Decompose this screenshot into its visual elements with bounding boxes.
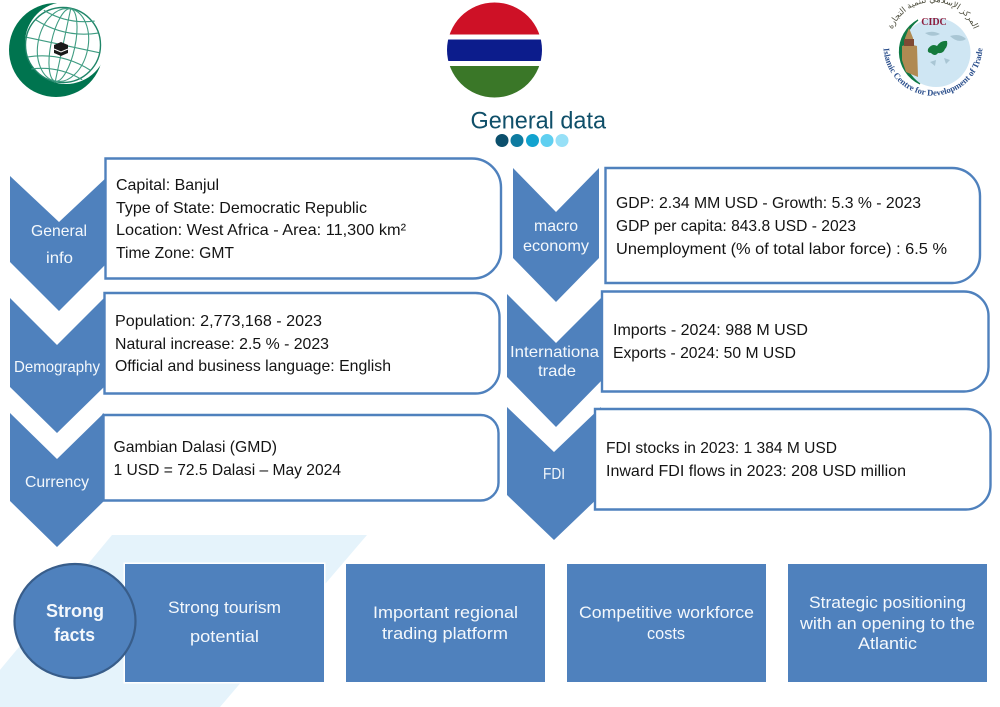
circle: strong facts: Strong	[46, 601, 104, 621]
chevron: macro economy: economy	[523, 238, 589, 255]
card: important regional trading platform	[346, 564, 545, 682]
card: strategic positioning: with an opening to the	[799, 614, 975, 633]
chevron: FDI	[507, 407, 601, 540]
chevron: currency	[10, 413, 104, 547]
card: important regional trading platform: Important regional	[373, 603, 518, 622]
chevron: international trade: trade	[538, 363, 576, 380]
card: competitive workforce costs: Competitive workforce	[579, 603, 754, 622]
flag of The Gambia	[445, 0, 545, 100]
text box: general info: Capital: Banjul	[116, 177, 219, 194]
text box: general info: Time Zone: GMT	[116, 245, 234, 262]
chevron: demography	[10, 298, 104, 433]
chevron: FDI: FDI	[543, 466, 565, 483]
chevron: general info	[10, 176, 108, 311]
chevron: general info: info	[46, 250, 73, 267]
card: important regional trading platform: trading platform	[382, 624, 508, 643]
text box: general info: Location: West Africa - Area: 11,300 km²	[116, 222, 407, 239]
chevron: macro economy	[513, 168, 599, 302]
text box: currency: Gambian Dalasi (GMD)	[114, 439, 277, 456]
text box: macro economy	[606, 168, 980, 283]
panel: FDI	[507, 407, 990, 540]
text box: international trade: Imports - 2024: 988 M USD	[613, 322, 808, 339]
chevron: currency: Currency	[25, 474, 89, 491]
text box: international trade	[602, 292, 988, 392]
text box: FDI: FDI stocks in 2023: 1 384 M USD	[606, 440, 837, 457]
panel: general info	[10, 158, 501, 311]
text box: currency: 1 USD = 72.5 Dalasi – May 2024	[114, 462, 341, 479]
circle: strong facts	[14, 564, 136, 678]
text box: FDI	[595, 409, 990, 510]
panel: currency	[10, 413, 499, 547]
card: strategic positioning: Strategic positioning	[809, 593, 966, 612]
chevron: macro economy: macro	[534, 218, 578, 235]
chevron: international trade	[507, 294, 605, 427]
text box: demography: Natural increase: 2.5 % - 2023	[115, 336, 329, 353]
text box: FDI: Inward FDI flows in 2023: 208 USD million	[606, 463, 906, 480]
panel: demography	[10, 293, 500, 433]
text box: currency	[104, 415, 499, 501]
logo: Islamic Centre for Development of Trade: Islamic Centre for Development of Trade	[884, 48, 982, 96]
text box: demography	[104, 293, 500, 394]
text box: general info	[106, 158, 501, 278]
chevron: international trade: Internationa	[510, 344, 599, 361]
card: strategic positioning	[788, 564, 987, 682]
background parallelogram	[0, 535, 367, 707]
logo: Islamic Centre for Development of Trade	[884, 0, 982, 96]
card: competitive workforce costs: costs	[647, 624, 685, 643]
title: General data	[470, 108, 607, 134]
text box: demography: Official and business language: English	[115, 358, 391, 375]
chevron: general info: General	[31, 223, 87, 240]
card: strong tourism potential: potential	[190, 627, 259, 646]
text box: macro economy: GDP: 2.34 MM USD - Growth: 5.3 % - 2023	[616, 195, 921, 212]
logo: Organisation of Islamic Cooperation crescent and globe	[9, 1, 107, 97]
text box: general info: Type of State: Democratic Republic	[116, 200, 367, 217]
logo: Islamic Centre for Development of Trade: CIDC	[921, 17, 947, 28]
card: strategic positioning: Atlantic	[858, 634, 918, 653]
panel: macro economy	[513, 168, 980, 302]
panel: international trade	[507, 292, 988, 427]
circle: strong facts: facts	[54, 625, 95, 645]
text box: international trade: Exports - 2024: 50 M USD	[613, 345, 796, 362]
text box: demography: Population: 2,773,168 - 2023	[115, 313, 322, 330]
card: competitive workforce costs	[567, 564, 766, 682]
title dots	[496, 134, 568, 147]
chevron: demography: Demography	[14, 359, 100, 376]
card: strong tourism potential: Strong tourism	[168, 598, 281, 617]
card: strong tourism potential	[124, 562, 326, 684]
text box: macro economy: Unemployment (% of total labor force) : 6.5 %	[616, 241, 947, 258]
text box: macro economy: GDP per capita: 843.8 USD - 2023	[616, 218, 856, 235]
